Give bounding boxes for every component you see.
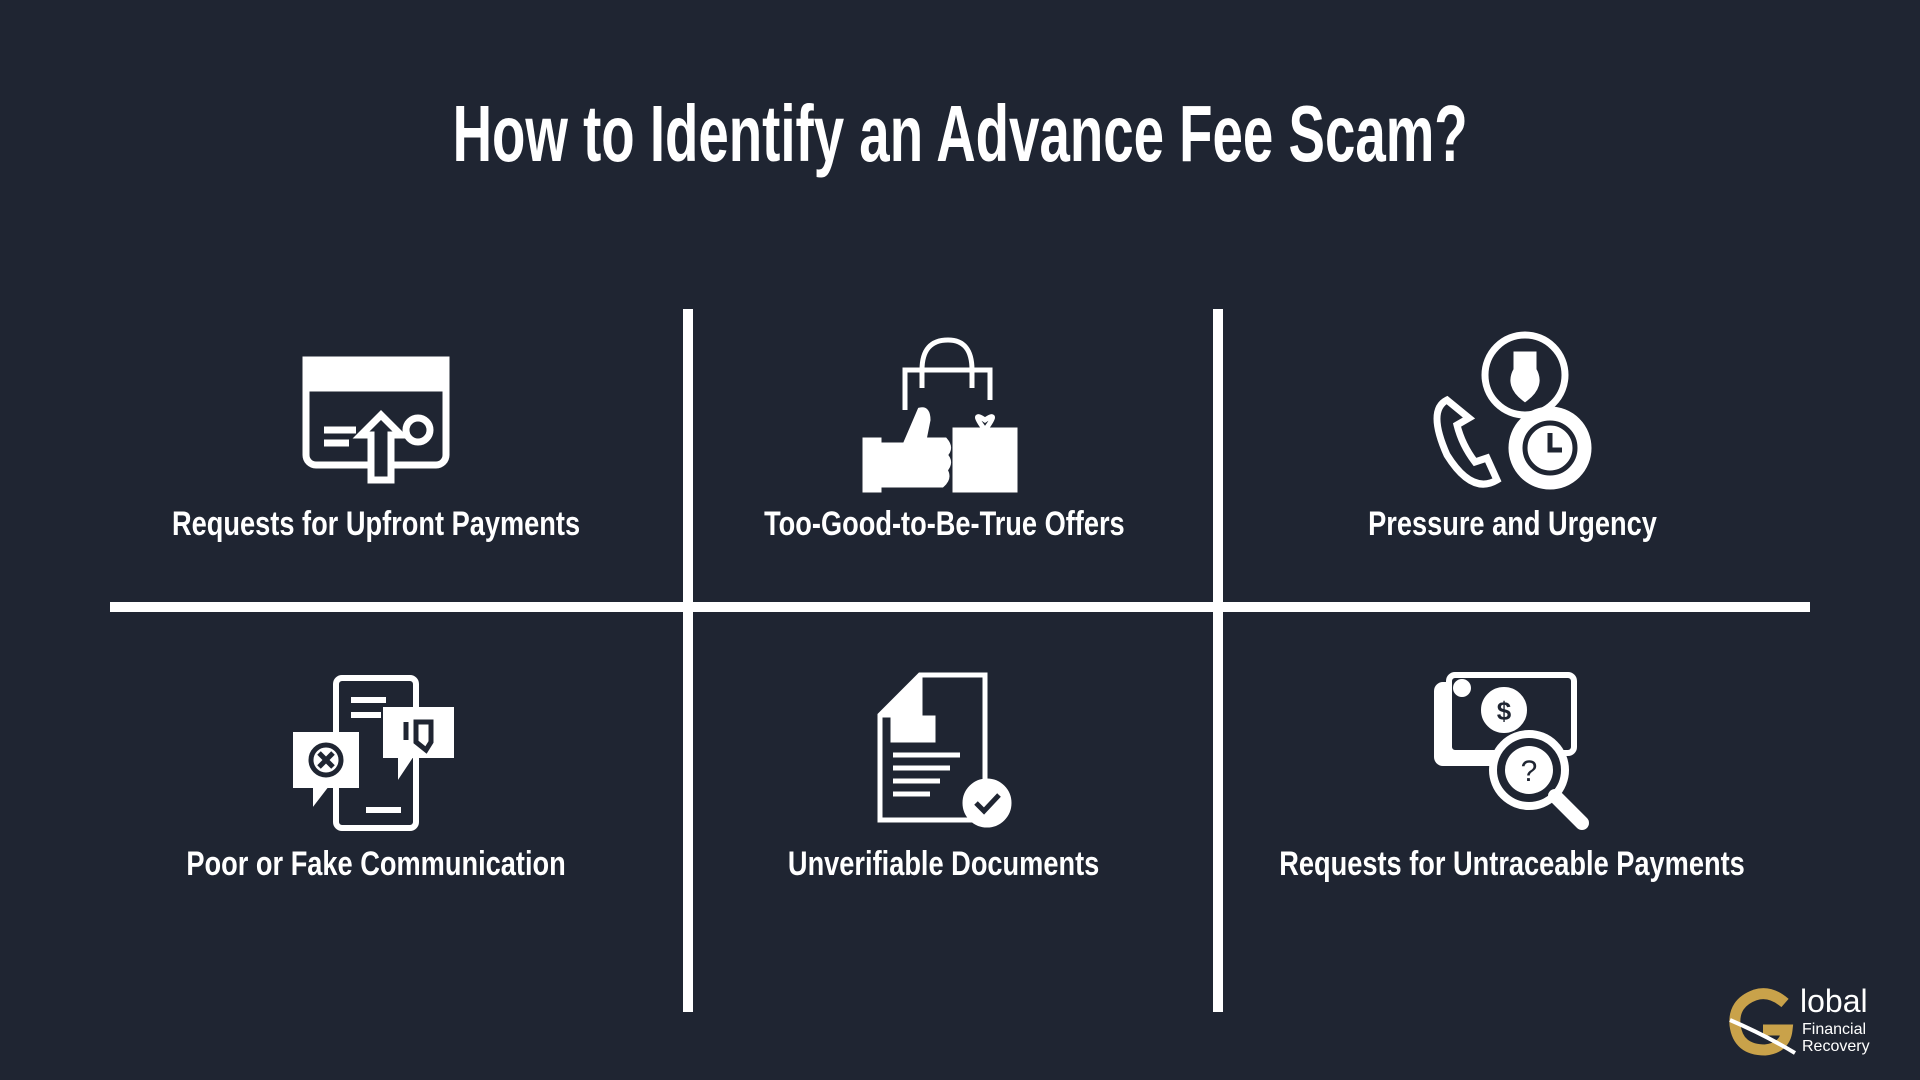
label: pressure: Pressure and Urgency bbox=[1368, 505, 1656, 543]
label: upfront payments: Requests for Upfront Payments bbox=[172, 505, 580, 543]
label: documents: Unverifiable Documents bbox=[788, 845, 1100, 883]
label: untraceable payments: Requests for Untraceable Payments bbox=[1279, 845, 1745, 883]
logo bbox=[1729, 983, 1870, 1056]
title: How to Identify an Advance Fee Scam? bbox=[452, 89, 1468, 178]
icon: untraceable payments: $ bbox=[1497, 696, 1512, 726]
icon: documents bbox=[878, 672, 1012, 828]
icon: untraceable payments: ? bbox=[1521, 755, 1537, 788]
logo: lobal bbox=[1800, 983, 1868, 1019]
icon: card upfront payment bbox=[302, 356, 450, 484]
icon: offers bbox=[862, 338, 1018, 492]
icon: pressure urgency bbox=[1434, 332, 1592, 490]
logo: Recovery bbox=[1802, 1038, 1870, 1055]
logo: Financial bbox=[1802, 1021, 1866, 1038]
icon: fake communication bbox=[293, 675, 454, 831]
label: offers: Too-Good-to-Be-True Offers bbox=[764, 505, 1124, 543]
icon: untraceable payments bbox=[1434, 672, 1589, 830]
label: communication: Poor or Fake Communication bbox=[186, 845, 566, 883]
